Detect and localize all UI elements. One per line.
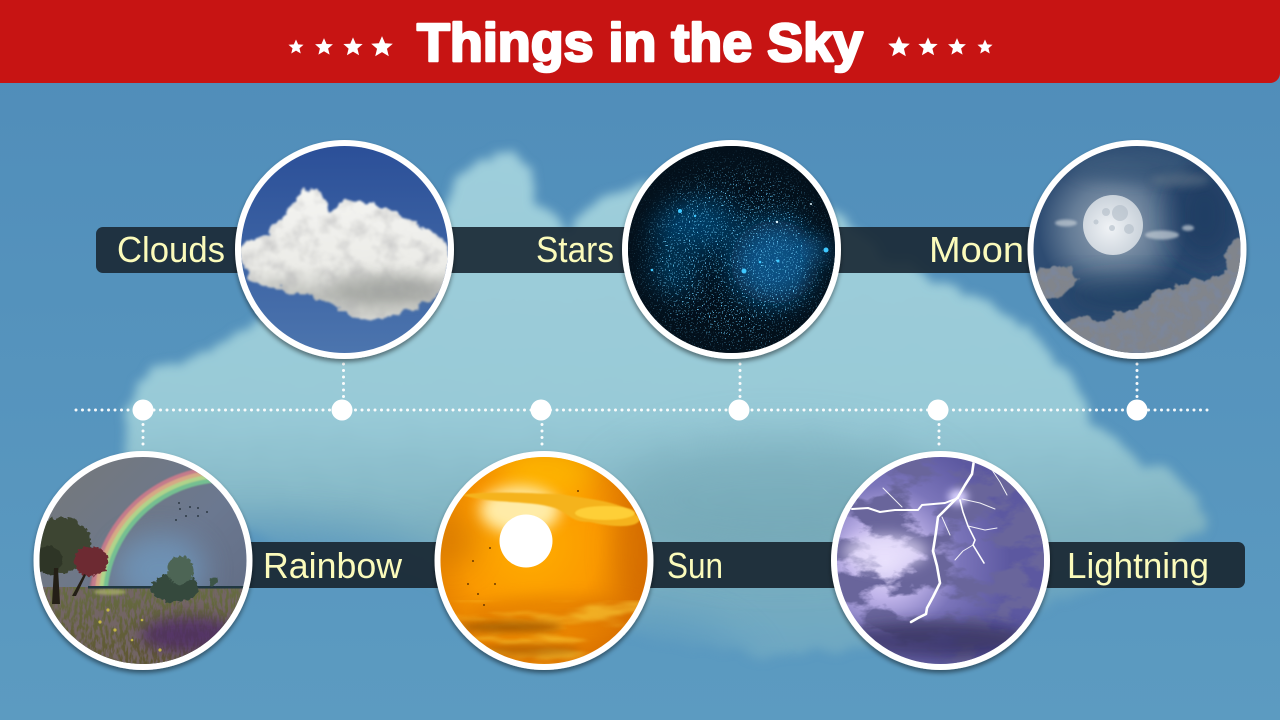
- label: Stars: Stars: [536, 229, 614, 270]
- label: Lightning: Lightning: [1067, 545, 1209, 586]
- timeline node: clouds: [332, 400, 352, 420]
- sun disc: [500, 514, 552, 568]
- stars: right of title: [888, 36, 993, 56]
- timeline node: rainbow: [132, 400, 154, 420]
- label: Clouds: Clouds: [117, 229, 225, 270]
- photo circle: rainbow: [30, 451, 254, 676]
- label: Rainbow: Rainbow: [263, 545, 403, 586]
- background cloud: [124, 150, 1208, 655]
- timeline node: sun: [530, 400, 552, 420]
- stars: left of title: [288, 36, 393, 56]
- moon disc: [1083, 195, 1143, 255]
- label: Moon: Moon: [929, 229, 1024, 270]
- photo circle: stars: [625, 143, 851, 356]
- label: Sun: Sun: [667, 545, 723, 586]
- photo circle: lightning: [834, 454, 1047, 667]
- timeline node: moon: [1126, 400, 1148, 420]
- timeline: [76, 364, 1208, 450]
- timeline node: stars: [728, 400, 750, 420]
- photo circle: clouds: [238, 143, 451, 356]
- photo circle: moon: [1030, 143, 1250, 360]
- trees: [33, 517, 218, 602]
- heading: title: Things in the Sky: [417, 13, 863, 73]
- bottom label band: [240, 542, 1245, 588]
- photo circle: sun: [428, 442, 666, 667]
- timeline node: lightning: [928, 400, 948, 420]
- lightning bolts: [852, 460, 1007, 622]
- header banner: [0, 0, 1280, 83]
- top label band: [96, 227, 1036, 273]
